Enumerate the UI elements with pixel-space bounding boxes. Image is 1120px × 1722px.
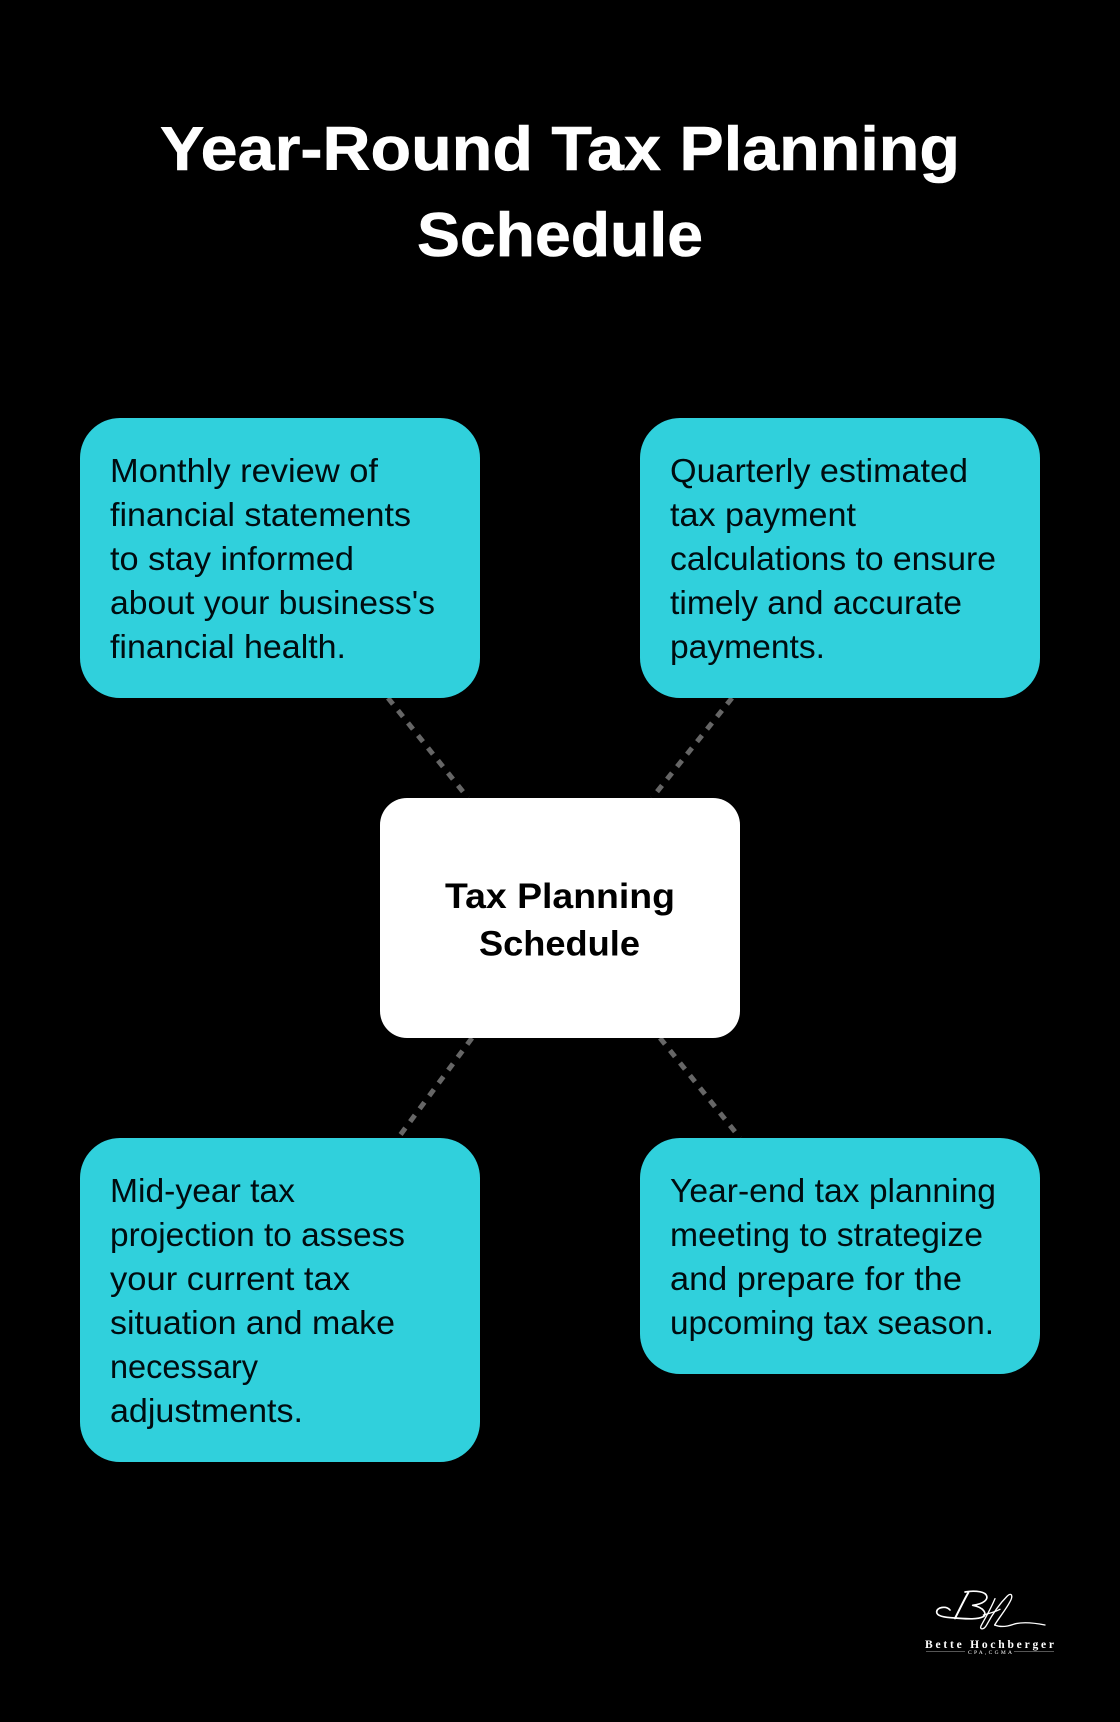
panel: mid-year projection: situation and make <box>110 1304 395 1341</box>
panel: year-end meeting <box>640 1138 1040 1374</box>
panel: quarterly estimated payments: tax payment <box>670 496 856 533</box>
title <box>160 115 960 270</box>
panel: monthly review <box>80 418 480 698</box>
connector: monthly review to center <box>388 698 468 798</box>
panel: year-end meeting: upcoming tax season. <box>670 1304 994 1341</box>
panel: year-end meeting: Year-end tax planning <box>670 1172 996 1209</box>
connector: quarterly payments to center <box>652 698 732 798</box>
panel: monthly review: to stay informed <box>110 540 354 577</box>
panel: quarterly estimated payments: timely and accurate <box>670 584 962 621</box>
logo: Bette Hochberger signature <box>925 1591 1054 1656</box>
connector: center to year-end meeting <box>660 1038 740 1138</box>
logo credentials: CPA,CGMA <box>968 1650 1012 1656</box>
panel: center topic: Schedule <box>479 924 640 964</box>
icon: handwritten signature flourish <box>937 1591 1045 1629</box>
panel: quarterly estimated payments <box>640 418 1040 698</box>
title: Schedule <box>417 201 703 270</box>
panel: center topic: Tax Planning <box>445 877 675 916</box>
panel: mid-year projection: projection to assess <box>110 1216 405 1253</box>
title: Year-Round Tax Planning <box>160 115 960 184</box>
panel: year-end meeting: and prepare for the <box>670 1260 962 1297</box>
panel: mid-year projection: adjustments. <box>110 1392 303 1429</box>
panel: mid-year projection: your current tax <box>110 1260 351 1297</box>
panel: monthly review: financial statements <box>110 496 411 533</box>
panel: monthly review: about your business's <box>110 584 435 621</box>
panel: quarterly estimated payments: payments. <box>670 628 825 665</box>
panel: mid-year projection <box>80 1138 480 1462</box>
panel: quarterly estimated payments: Quarterly estimated <box>670 452 968 489</box>
panel: monthly review: Monthly review of <box>110 452 379 489</box>
panel: monthly review: financial health. <box>110 628 346 665</box>
connector: center to mid-year projection <box>398 1038 472 1138</box>
panel: quarterly estimated payments: calculations to ensure <box>670 540 996 577</box>
panel: year-end meeting: meeting to strategize <box>670 1216 983 1253</box>
logo name: Bette Hochberger <box>925 1639 1054 1651</box>
panel: mid-year projection: Mid-year tax <box>110 1172 295 1209</box>
panel: mid-year projection: necessary <box>110 1348 258 1385</box>
panel: center topic <box>380 798 740 1038</box>
